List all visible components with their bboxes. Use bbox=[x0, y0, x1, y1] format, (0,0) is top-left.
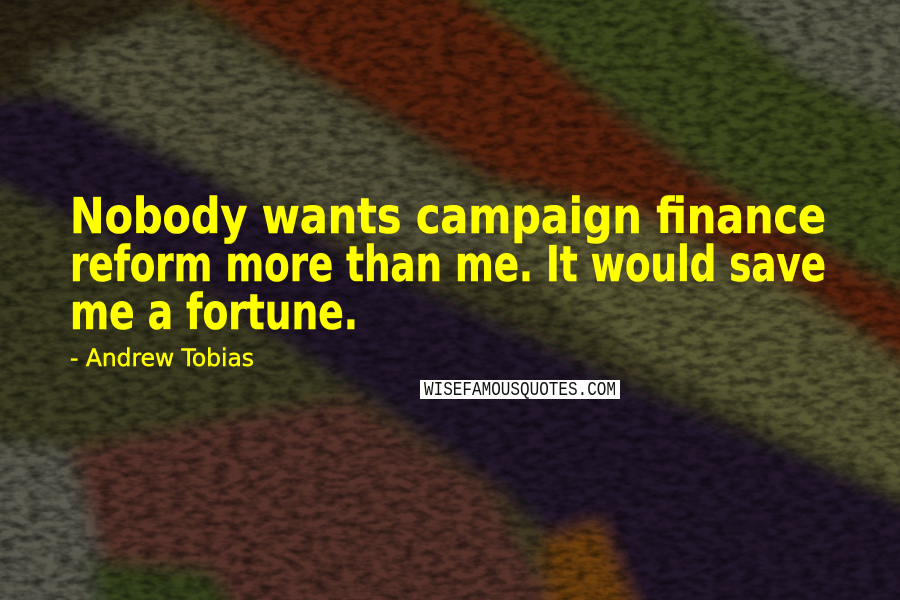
watermark badge: WISEFAMOUSQUOTES.COM bbox=[424, 380, 616, 402]
author attribution: - Andrew Tobias bbox=[70, 344, 254, 372]
quote text bbox=[70, 188, 826, 341]
quote line 3: me a fortune. bbox=[70, 284, 358, 341]
